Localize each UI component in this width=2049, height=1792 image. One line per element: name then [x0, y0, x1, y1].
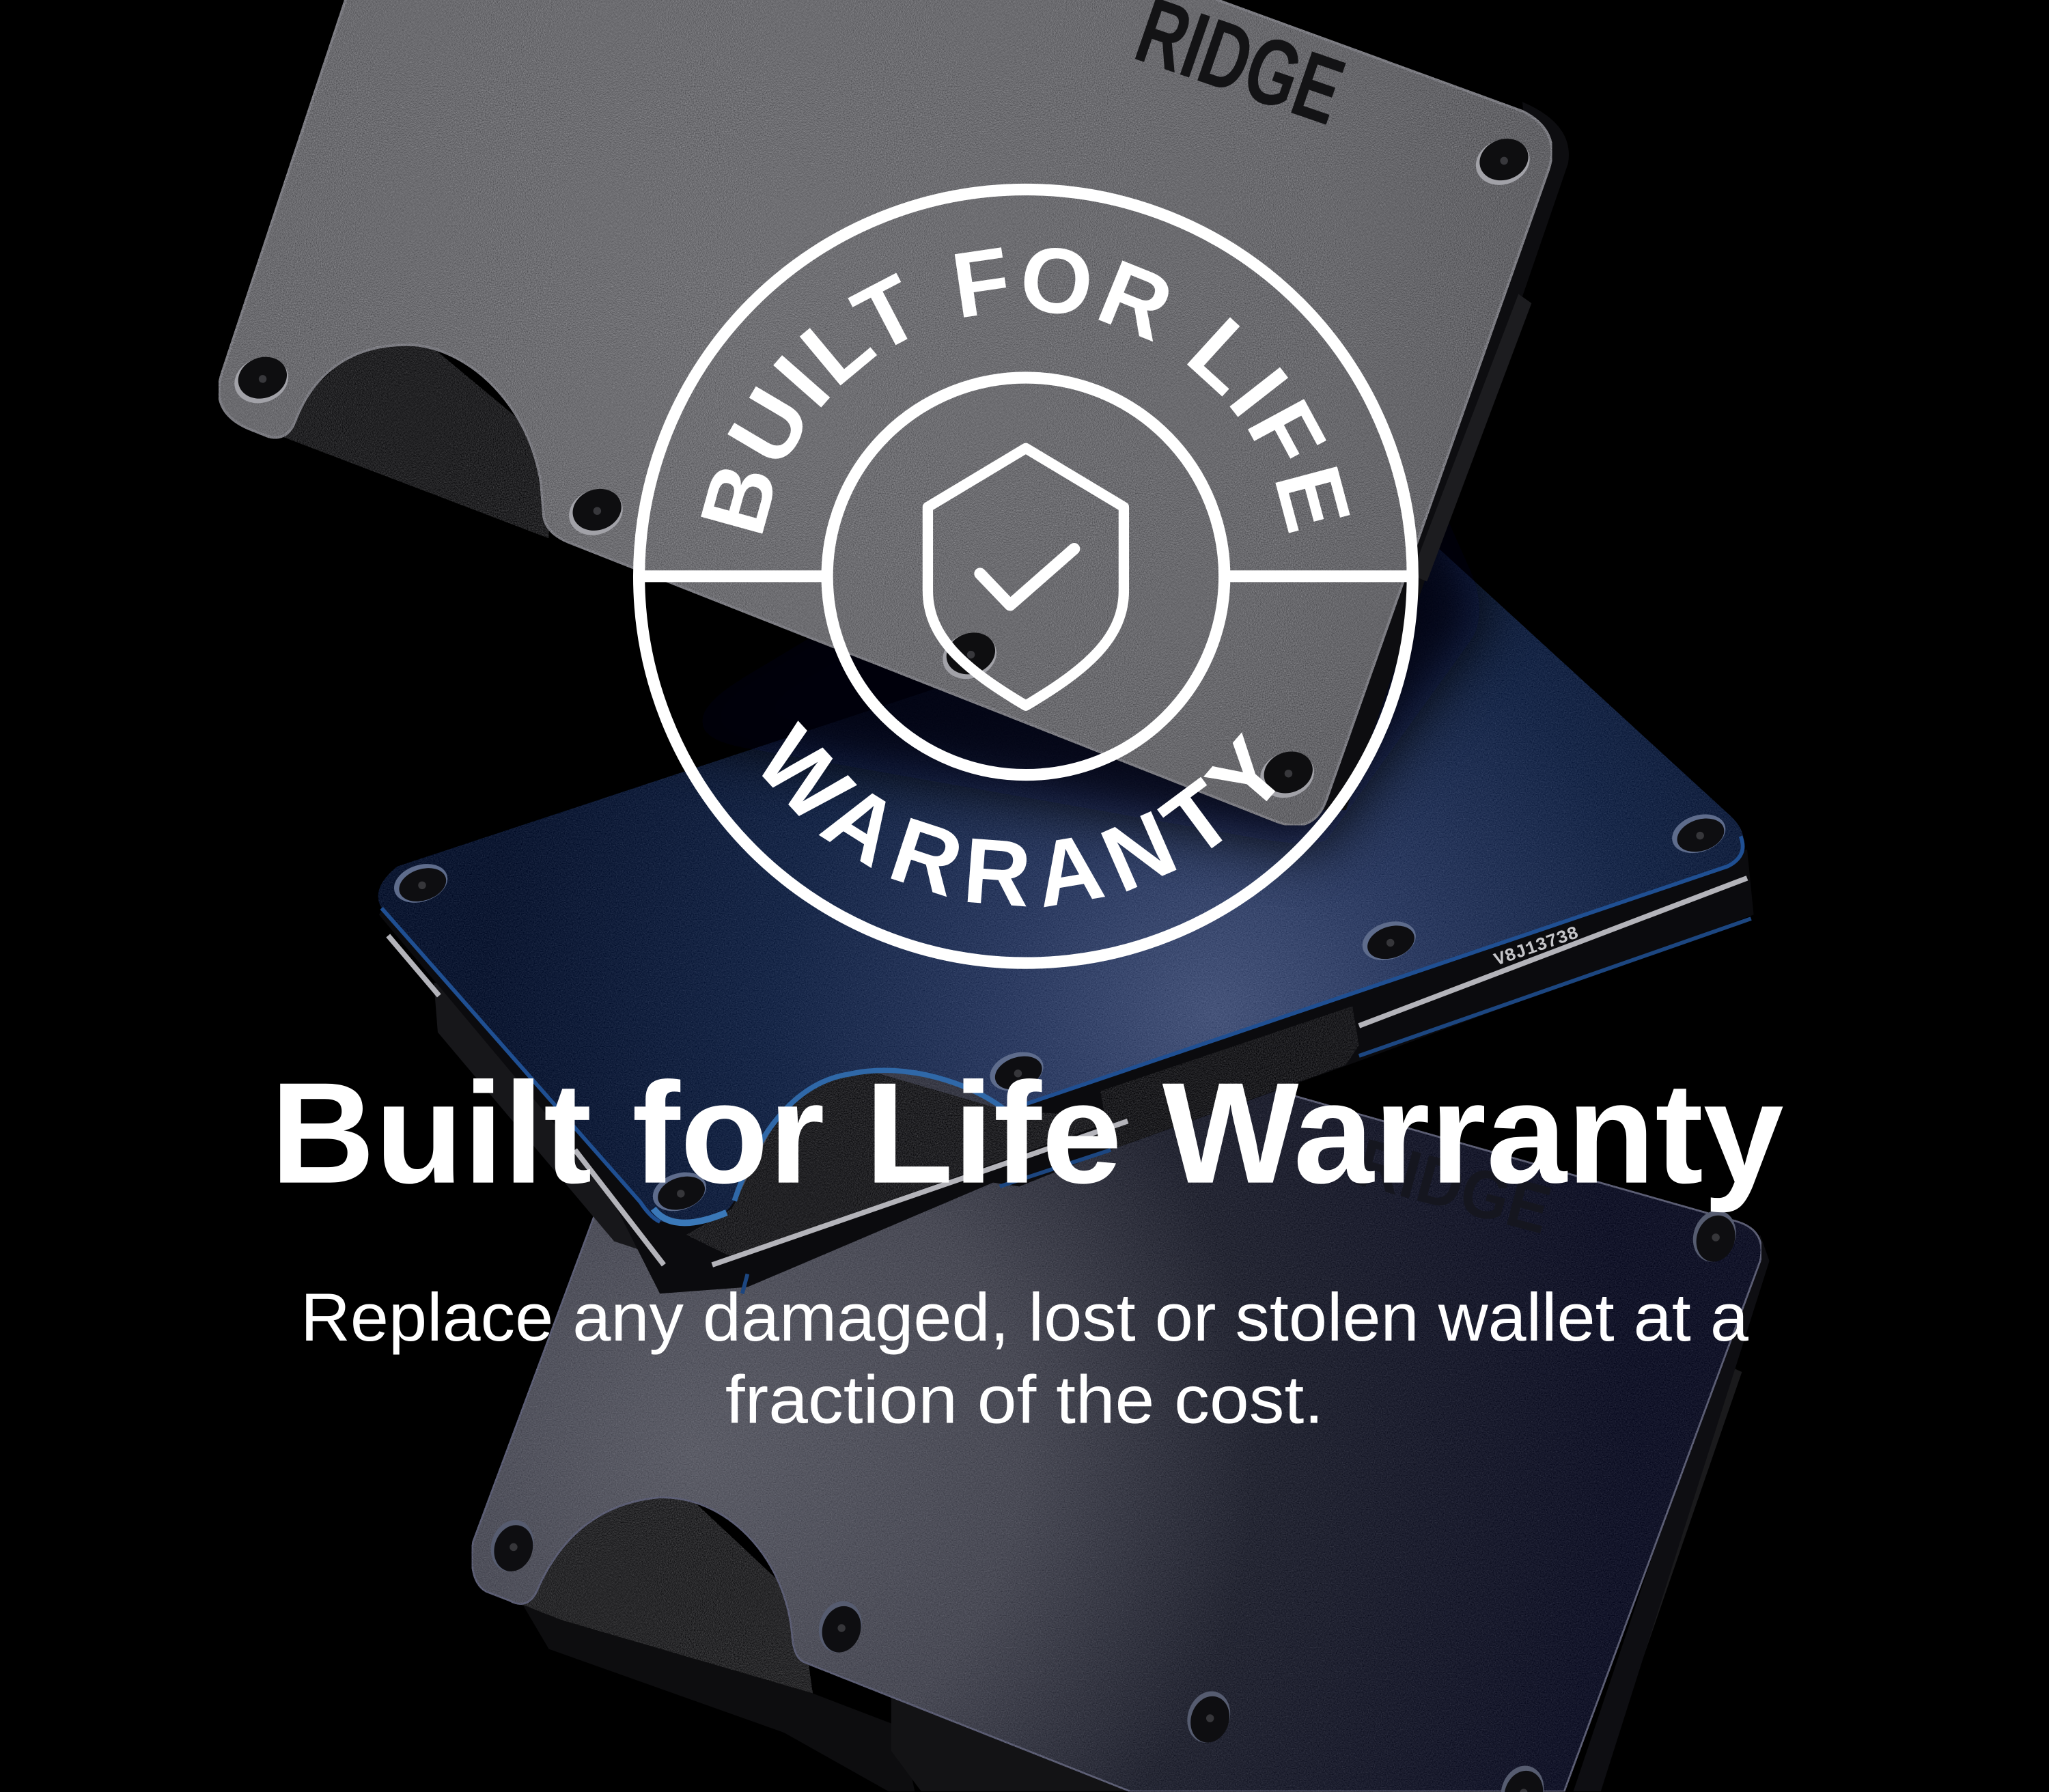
title: Built for Life Warranty	[270, 1052, 1784, 1214]
plate blue edge	[382, 837, 1743, 1222]
serial number: V8J13738	[1492, 923, 1582, 971]
icon: shield	[928, 448, 1124, 705]
icon: check	[980, 549, 1074, 605]
wallet: navy	[378, 496, 1754, 1293]
notch backing	[268, 313, 549, 538]
divider	[639, 573, 1412, 579]
blue lower edge	[742, 919, 1751, 1293]
right back plate edge	[1574, 1235, 1770, 1791]
bottom plate	[472, 1046, 1761, 1791]
right elastic	[1411, 294, 1531, 581]
elastic band right	[1100, 1006, 1359, 1150]
notch backing	[686, 1065, 1124, 1257]
subtitle line 1: Replace any damaged, lost or stolen wallet at a	[301, 1280, 1749, 1356]
back plate	[1320, 102, 1569, 810]
screws: navy wallet	[389, 808, 1731, 1218]
warranty badge	[632, 183, 1419, 969]
silver lines	[388, 878, 1747, 1265]
corner highlight	[654, 1209, 727, 1223]
black edge stack right	[379, 850, 1754, 1293]
elastic and back plate of bottom wallet	[486, 1464, 813, 1694]
screws: gray wallet	[228, 132, 1536, 805]
lower edge stack	[522, 1605, 915, 1791]
inner ring	[827, 378, 1225, 775]
navy plate	[378, 529, 1744, 1223]
badge text: warranty: WARRANTY	[762, 720, 1276, 907]
wallet: bottom graphite	[472, 1046, 1770, 1792]
subtitle line 2: fraction of the cost.	[725, 1362, 1324, 1438]
badge text: built for life: BUILT FOR LIFE	[701, 247, 1350, 534]
plate	[219, 0, 1552, 825]
engraved logo ghost: RIDGE	[1350, 1125, 1559, 1248]
screws: bottom wallet	[484, 1205, 1742, 1792]
shadow cast by gray wallet	[654, 496, 1490, 850]
subtitle	[301, 1280, 1749, 1438]
right elastic	[1597, 1365, 1742, 1731]
wallet: top gray	[219, 0, 1569, 825]
lower elastic strap	[891, 1694, 1143, 1791]
notch highlight	[734, 1070, 1006, 1201]
outer ring	[639, 189, 1412, 963]
arc paths	[761, 311, 1291, 576]
elastic left	[434, 983, 654, 1255]
